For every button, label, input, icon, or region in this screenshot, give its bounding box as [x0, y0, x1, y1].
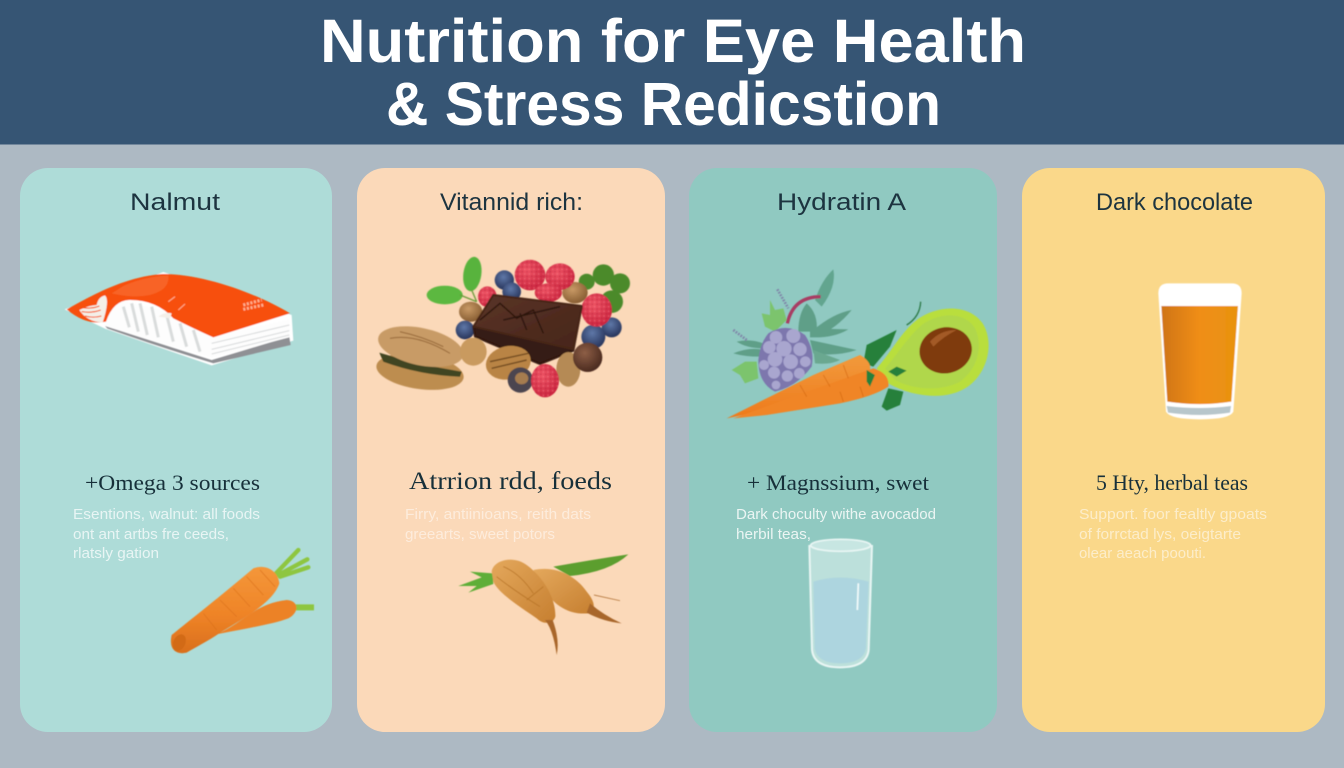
body text: Dark choculty withe avocadod — [736, 506, 936, 523]
subheading: 5 Hty, herbal teas — [1096, 470, 1248, 495]
heading: Dark chocolate: Dark chocolate — [1096, 189, 1253, 216]
icon: salmon book — [65, 272, 293, 365]
body text: herbil teas, — [736, 526, 811, 543]
icon: herbs, grapes, carrots and avocado — [727, 269, 989, 418]
panel: walnut — [20, 168, 332, 732]
body text — [1079, 506, 1267, 562]
heading: Nalmut: Nalmut — [130, 189, 220, 216]
body text — [73, 506, 260, 562]
panel: vitamin rich — [357, 168, 665, 732]
body text: Firry, antiinioans, reith dats — [405, 506, 591, 523]
body text: Esentions, walnut: all foods — [73, 506, 260, 523]
icon: carrots — [170, 550, 314, 653]
berries — [478, 260, 612, 327]
avocado — [877, 302, 989, 396]
title — [320, 7, 1026, 138]
icon: chocolate, berries and nuts — [374, 256, 630, 397]
nut sandwich — [374, 319, 467, 395]
mint leaves — [427, 256, 484, 304]
body text — [405, 506, 591, 543]
grapes — [758, 328, 812, 392]
parsley — [579, 264, 630, 313]
icon: root vegetables — [458, 554, 628, 655]
body text — [736, 506, 936, 543]
body text: rlatsly gation — [73, 545, 159, 562]
body text: olear aeach poouti. — [1079, 545, 1206, 562]
heading: Hydratin A: Hydratin A — [777, 189, 906, 216]
title: & Stress Redicstion — [386, 70, 941, 138]
herb leaves — [732, 269, 857, 383]
subheading: + Magnssium, swet — [747, 470, 929, 495]
body text: ont ant artbs fre ceeds, — [73, 526, 229, 543]
icon: glass of herbal tea — [1158, 283, 1242, 419]
body text: greearts, sweet potors — [405, 526, 555, 543]
heading: Vitannid rich: Vitannid rich: — [440, 189, 583, 216]
title: Nutrition for Eye Health — [320, 7, 1026, 75]
panel: hydration — [689, 168, 997, 732]
body text: of forrctad lys, oeigtarte — [1079, 526, 1241, 543]
icon: glass of water — [809, 539, 872, 667]
subheading: Atrrion rdd, foeds — [409, 468, 612, 495]
carrots — [727, 355, 888, 418]
chocolate bar — [473, 295, 582, 364]
subheading: +Omega 3 sources — [85, 470, 260, 495]
body text: Support. foor fealtly gpoats — [1079, 506, 1267, 523]
header banner — [0, 0, 1344, 144]
panel: dark chocolate — [1022, 168, 1325, 732]
